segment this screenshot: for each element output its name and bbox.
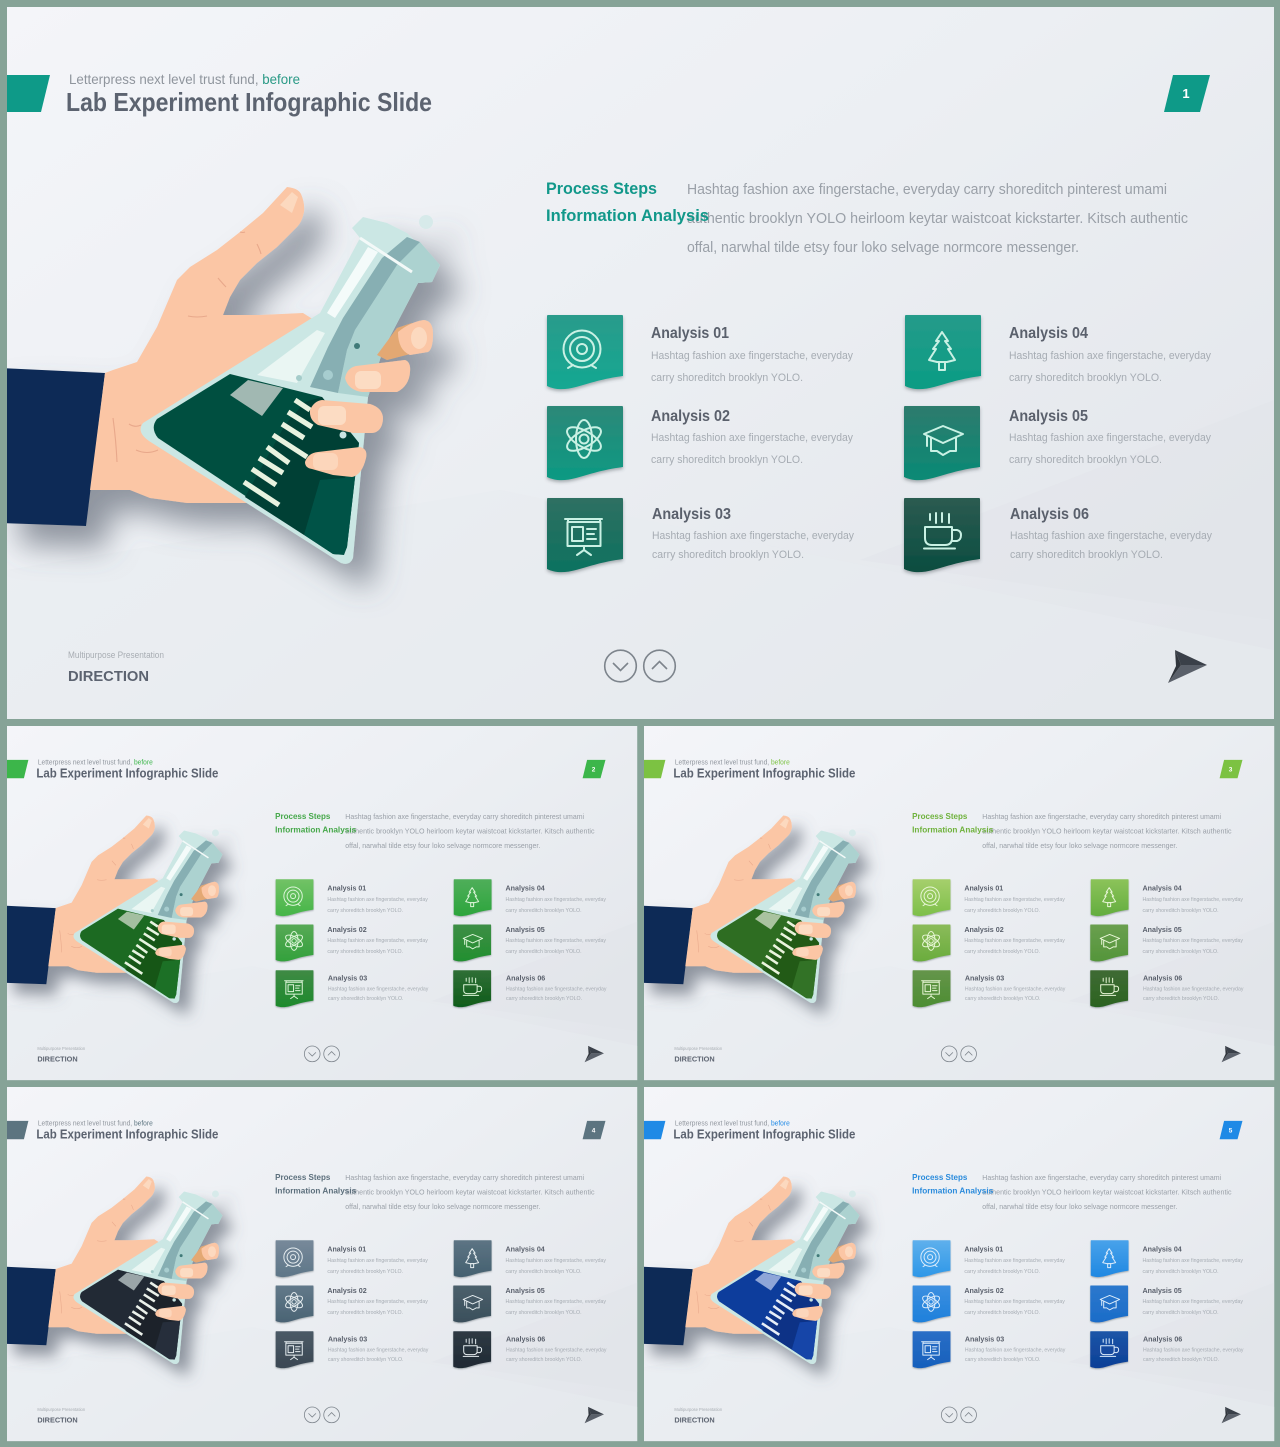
page number badge <box>583 1121 605 1139</box>
analysis 02: Hashtag fashion axe fingerstache, everyday <box>964 1299 1065 1305</box>
analysis 02: Hashtag fashion axe fingerstache, everyday <box>964 938 1065 944</box>
header text: Letterpress next level trust fund, before <box>675 1120 790 1127</box>
intro text: Information Analysis <box>912 1185 994 1195</box>
analysis 02: Hashtag fashion axe fingerstache, everyday <box>327 938 428 944</box>
analysis 06 <box>453 970 607 1007</box>
analysis 02: carry shoreditch brooklyn YOLO. <box>327 1310 403 1316</box>
illustration: hand holding flask <box>0 187 440 564</box>
header badge <box>7 75 50 112</box>
analysis 06: carry shoreditch brooklyn YOLO. <box>1143 996 1220 1002</box>
page number badge: 3 <box>1229 766 1233 773</box>
page number badge <box>1164 75 1210 112</box>
illustration: hand holding flask <box>4 816 222 1003</box>
footer text <box>674 1046 723 1063</box>
analysis 04 <box>1091 1240 1243 1277</box>
intro text: Process Steps <box>912 1172 968 1182</box>
page number badge: 4 <box>592 1127 596 1134</box>
analysis 04 <box>905 315 1211 389</box>
intro text: offal, narwhal tilde etsy four loko selvage normcore messenger. <box>345 1202 540 1211</box>
intro text: Information Analysis <box>275 824 357 834</box>
analysis 05: carry shoreditch brooklyn YOLO. <box>505 1310 582 1316</box>
analysis 04: Hashtag fashion axe fingerstache, everyday <box>505 1258 606 1264</box>
panel: slide 5 (blue) <box>641 1087 1274 1441</box>
intro text: offal, narwhal tilde etsy four loko selvage normcore messenger. <box>345 841 540 850</box>
analysis 01: Hashtag fashion axe fingerstache, everyday <box>327 897 428 903</box>
analysis 03: Analysis 03 <box>328 974 367 983</box>
analysis 01: Hashtag fashion axe fingerstache, everyday <box>964 897 1065 903</box>
footer text: DIRECTION <box>37 1054 78 1063</box>
analysis 03: Analysis 03 <box>328 1335 367 1344</box>
analysis 01: carry shoreditch brooklyn YOLO. <box>964 1269 1040 1275</box>
analysis 04: carry shoreditch brooklyn YOLO. <box>505 908 582 914</box>
analysis 02 <box>276 1286 428 1322</box>
analysis 02: Analysis 02 <box>327 925 367 934</box>
analysis 03: Analysis 03 <box>965 974 1004 983</box>
analysis 01: Analysis 01 <box>964 884 1004 893</box>
analysis 03: Hashtag fashion axe fingerstache, everyday <box>965 1348 1066 1354</box>
analysis 01: Analysis 01 <box>327 884 367 893</box>
footer text: DIRECTION <box>37 1415 78 1424</box>
analysis 03 <box>276 1331 429 1368</box>
analysis 04: Hashtag fashion axe fingerstache, everyday <box>505 897 606 903</box>
analysis 03: carry shoreditch brooklyn YOLO. <box>965 1357 1041 1363</box>
analysis 05: carry shoreditch brooklyn YOLO. <box>1142 949 1219 955</box>
analysis 01 <box>913 879 1065 916</box>
analysis 03 <box>913 970 1066 1007</box>
icon: paper plane <box>585 1407 604 1423</box>
analysis 03 <box>276 970 429 1007</box>
header text: Letterpress next level trust fund, before <box>38 759 153 766</box>
analysis 04 <box>454 879 606 916</box>
analysis 06 <box>453 1331 607 1368</box>
intro text: Information Analysis <box>546 206 709 225</box>
header text: Letterpress next level trust fund, before <box>69 71 300 87</box>
analysis 06: Hashtag fashion axe fingerstache, everyday <box>506 987 607 993</box>
analysis 03: Analysis 03 <box>652 506 731 523</box>
intro text: Information Analysis <box>275 1185 357 1195</box>
analysis 03: Hashtag fashion axe fingerstache, everyday <box>328 987 429 993</box>
illustration: hand holding flask <box>641 1177 859 1364</box>
intro text: Information Analysis <box>912 824 994 834</box>
footer text: Multipurpose Presentation <box>674 1407 723 1412</box>
analysis 05: carry shoreditch brooklyn YOLO. <box>1142 1310 1219 1316</box>
intro text: authentic brooklyn YOLO heirloom keytar waistcoat kickstarter. Kitsch authentic <box>687 210 1188 227</box>
header text <box>673 1120 855 1142</box>
intro text <box>546 179 1188 256</box>
analysis 03: Hashtag fashion axe fingerstache, everyday <box>965 987 1066 993</box>
page number badge: 2 <box>592 766 596 773</box>
header badge <box>641 1121 665 1139</box>
analysis 02: carry shoreditch brooklyn YOLO. <box>327 949 403 955</box>
analysis 05: Hashtag fashion axe fingerstache, everyday <box>1142 1299 1243 1305</box>
header text <box>36 1120 218 1142</box>
nav arrows <box>304 1407 339 1423</box>
header text: Lab Experiment Infographic Slide <box>36 766 218 781</box>
analysis 05: Analysis 05 <box>505 1286 545 1295</box>
panel: main slide (teal) <box>0 7 1274 719</box>
footer text: DIRECTION <box>674 1054 715 1063</box>
analysis 02: Analysis 02 <box>964 925 1004 934</box>
analysis 05: Analysis 05 <box>1009 408 1088 425</box>
header badge <box>7 760 28 778</box>
intro text: Hashtag fashion axe fingerstache, everyday carry shoreditch pinterest umami <box>345 812 584 821</box>
analysis 02: carry shoreditch brooklyn YOLO. <box>964 1310 1040 1316</box>
footer text <box>674 1407 723 1424</box>
analysis 05: carry shoreditch brooklyn YOLO. <box>1009 454 1162 466</box>
nav arrows <box>941 1046 976 1062</box>
analysis 06: carry shoreditch brooklyn YOLO. <box>1010 549 1163 561</box>
analysis 02 <box>913 925 1065 961</box>
analysis 01: carry shoreditch brooklyn YOLO. <box>651 372 803 384</box>
panel: slide 3 (lime) <box>641 726 1274 1080</box>
footer text <box>38 1046 85 1062</box>
analysis 06: Analysis 06 <box>1010 506 1089 523</box>
footer text: DIRECTION <box>68 669 149 685</box>
analysis 04 <box>454 1240 606 1277</box>
footer text: DIRECTION <box>674 1415 715 1424</box>
analysis 01: Hashtag fashion axe fingerstache, everyday <box>964 1258 1065 1264</box>
analysis 04: carry shoreditch brooklyn YOLO. <box>1142 1269 1219 1275</box>
intro text: Hashtag fashion axe fingerstache, everyday carry shoreditch pinterest umami <box>982 1173 1221 1182</box>
analysis 06: Hashtag fashion axe fingerstache, everyday <box>1143 987 1244 993</box>
analysis 06: carry shoreditch brooklyn YOLO. <box>506 1357 583 1363</box>
analysis 03 <box>913 1331 1066 1368</box>
analysis 04: Hashtag fashion axe fingerstache, everyday <box>1142 1258 1243 1264</box>
analysis 05 <box>904 406 1211 480</box>
analysis 02: Analysis 02 <box>964 1286 1004 1295</box>
illustration: hand holding flask <box>641 816 859 1003</box>
header text: Lab Experiment Infographic Slide <box>36 1127 218 1142</box>
analysis 01 <box>276 1240 428 1277</box>
header badge <box>644 760 666 778</box>
panel: slide 4 (slate) <box>4 1087 637 1441</box>
analysis 05 <box>1090 925 1243 961</box>
header badge <box>4 1121 28 1139</box>
page number badge: 5 <box>1229 1127 1233 1134</box>
intro text: authentic brooklyn YOLO heirloom keytar waistcoat kickstarter. Kitsch authentic <box>345 826 595 835</box>
analysis 01: Hashtag fashion axe fingerstache, everyday <box>327 1258 428 1264</box>
analysis 04: Hashtag fashion axe fingerstache, everyday <box>1009 350 1211 362</box>
analysis 03: carry shoreditch brooklyn YOLO. <box>328 1357 404 1363</box>
analysis 02: Analysis 02 <box>327 1286 367 1295</box>
intro text: offal, narwhal tilde etsy four loko selvage normcore messenger. <box>982 1202 1177 1211</box>
footer text <box>68 652 164 681</box>
analysis 03: carry shoreditch brooklyn YOLO. <box>965 996 1041 1002</box>
analysis 01: carry shoreditch brooklyn YOLO. <box>964 908 1040 914</box>
analysis 03 <box>547 498 854 572</box>
analysis 05: Hashtag fashion axe fingerstache, everyday <box>1142 938 1243 944</box>
intro text <box>275 811 595 850</box>
analysis 02: Hashtag fashion axe fingerstache, everyday <box>651 432 853 444</box>
analysis 04: Analysis 04 <box>505 884 545 893</box>
intro text: Hashtag fashion axe fingerstache, everyday carry shoreditch pinterest umami <box>982 812 1221 821</box>
analysis 01: Hashtag fashion axe fingerstache, everyday <box>651 350 853 362</box>
icon: paper plane <box>585 1046 604 1062</box>
analysis 05: Analysis 05 <box>1142 1286 1182 1295</box>
analysis 05: Hashtag fashion axe fingerstache, everyday <box>1009 432 1211 444</box>
analysis 04: Analysis 04 <box>1142 884 1182 893</box>
analysis 02 <box>276 925 428 961</box>
analysis 06: Hashtag fashion axe fingerstache, everyday <box>1143 1348 1244 1354</box>
header text <box>36 759 218 781</box>
page number badge <box>1220 1121 1242 1139</box>
intro text: Process Steps <box>275 1172 331 1182</box>
intro text: authentic brooklyn YOLO heirloom keytar waistcoat kickstarter. Kitsch authentic <box>982 826 1232 835</box>
analysis 04: carry shoreditch brooklyn YOLO. <box>505 1269 582 1275</box>
header text: Lab Experiment Infographic Slide <box>673 766 855 781</box>
analysis 02 <box>913 1286 1065 1322</box>
analysis 02: carry shoreditch brooklyn YOLO. <box>651 454 803 466</box>
intro text <box>912 1172 1232 1211</box>
analysis 04: Analysis 04 <box>1009 325 1088 342</box>
analysis 04: Hashtag fashion axe fingerstache, everyday <box>1142 897 1243 903</box>
page number badge <box>1220 760 1242 778</box>
analysis 04: carry shoreditch brooklyn YOLO. <box>1009 372 1162 384</box>
analysis 02 <box>547 406 853 480</box>
intro text: authentic brooklyn YOLO heirloom keytar waistcoat kickstarter. Kitsch authentic <box>345 1187 595 1196</box>
footer text <box>37 1407 86 1424</box>
intro text: Process Steps <box>912 811 968 821</box>
header text <box>673 759 855 781</box>
footer text: Multipurpose Presentation <box>37 1046 86 1051</box>
intro text <box>912 811 1232 850</box>
nav arrows <box>304 1046 339 1062</box>
analysis 05: Analysis 05 <box>505 925 545 934</box>
analysis 01 <box>276 879 428 916</box>
analysis 05 <box>453 925 606 961</box>
analysis 01 <box>547 315 853 389</box>
analysis 06: Analysis 06 <box>1143 1335 1182 1344</box>
analysis 03: carry shoreditch brooklyn YOLO. <box>652 549 804 561</box>
analysis 01: Analysis 01 <box>327 1245 367 1254</box>
analysis 05 <box>453 1286 606 1322</box>
analysis 01 <box>913 1240 1065 1277</box>
analysis 06 <box>1090 1331 1244 1368</box>
panel: slide 2 (green) <box>4 726 637 1080</box>
intro text: Hashtag fashion axe fingerstache, everyday carry shoreditch pinterest umami <box>345 1173 584 1182</box>
analysis 01: Analysis 01 <box>964 1245 1004 1254</box>
intro text: Process Steps <box>275 811 331 821</box>
intro text: authentic brooklyn YOLO heirloom keytar waistcoat kickstarter. Kitsch authentic <box>982 1187 1232 1196</box>
analysis 06 <box>904 498 1212 572</box>
analysis 02: Analysis 02 <box>651 408 730 425</box>
analysis 06: Analysis 06 <box>506 1335 545 1344</box>
header text: Letterpress next level trust fund, before <box>675 759 790 766</box>
analysis 05: Analysis 05 <box>1142 925 1182 934</box>
analysis 01: carry shoreditch brooklyn YOLO. <box>327 1269 403 1275</box>
analysis 06 <box>1090 970 1244 1007</box>
analysis 03: carry shoreditch brooklyn YOLO. <box>328 996 404 1002</box>
analysis 02: Hashtag fashion axe fingerstache, everyday <box>327 1299 428 1305</box>
analysis 05: carry shoreditch brooklyn YOLO. <box>505 949 582 955</box>
intro text: offal, narwhal tilde etsy four loko selvage normcore messenger. <box>687 239 1079 256</box>
analysis 06: carry shoreditch brooklyn YOLO. <box>506 996 583 1002</box>
intro text: Hashtag fashion axe fingerstache, everyday carry shoreditch pinterest umami <box>687 181 1167 198</box>
header text <box>66 71 432 117</box>
analysis 06: Analysis 06 <box>506 974 545 983</box>
header text: Letterpress next level trust fund, before <box>38 1120 153 1127</box>
analysis 04: Analysis 04 <box>505 1245 545 1254</box>
analysis 01: carry shoreditch brooklyn YOLO. <box>327 908 403 914</box>
header text: Lab Experiment Infographic Slide <box>673 1127 855 1142</box>
analysis 04 <box>1091 879 1243 916</box>
footer text: Multipurpose Presentation <box>37 1407 86 1412</box>
analysis 03: Hashtag fashion axe fingerstache, everyday <box>652 530 854 542</box>
analysis 03: Hashtag fashion axe fingerstache, everyday <box>328 1348 429 1354</box>
icon: paper plane <box>1222 1046 1241 1062</box>
analysis 05: Hashtag fashion axe fingerstache, everyday <box>505 938 606 944</box>
page number badge <box>583 760 605 778</box>
illustration: hand holding flask <box>4 1177 222 1364</box>
analysis 05 <box>1090 1286 1243 1322</box>
analysis 04: Analysis 04 <box>1142 1245 1182 1254</box>
header text: Lab Experiment Infographic Slide <box>66 87 432 117</box>
footer text: Multipurpose Presentation <box>68 650 164 660</box>
intro text <box>275 1172 595 1211</box>
icon: paper plane <box>1222 1407 1241 1423</box>
analysis 06: carry shoreditch brooklyn YOLO. <box>1143 1357 1220 1363</box>
analysis 03: Analysis 03 <box>965 1335 1004 1344</box>
analysis 05: Hashtag fashion axe fingerstache, everyday <box>505 1299 606 1305</box>
page number badge: 1 <box>1182 86 1190 101</box>
nav arrows <box>605 650 675 682</box>
icon: paper plane <box>1168 650 1207 683</box>
footer text: Multipurpose Presentation <box>674 1046 723 1051</box>
analysis 02: carry shoreditch brooklyn YOLO. <box>964 949 1040 955</box>
intro text: offal, narwhal tilde etsy four loko selvage normcore messenger. <box>982 841 1177 850</box>
nav arrows <box>941 1407 976 1423</box>
analysis 01: Analysis 01 <box>651 325 729 342</box>
analysis 06: Hashtag fashion axe fingerstache, everyday <box>1010 530 1212 542</box>
analysis 06: Analysis 06 <box>1143 974 1182 983</box>
analysis 06: Hashtag fashion axe fingerstache, everyday <box>506 1348 607 1354</box>
intro text: Process Steps <box>546 179 657 198</box>
analysis 04: carry shoreditch brooklyn YOLO. <box>1142 908 1219 914</box>
